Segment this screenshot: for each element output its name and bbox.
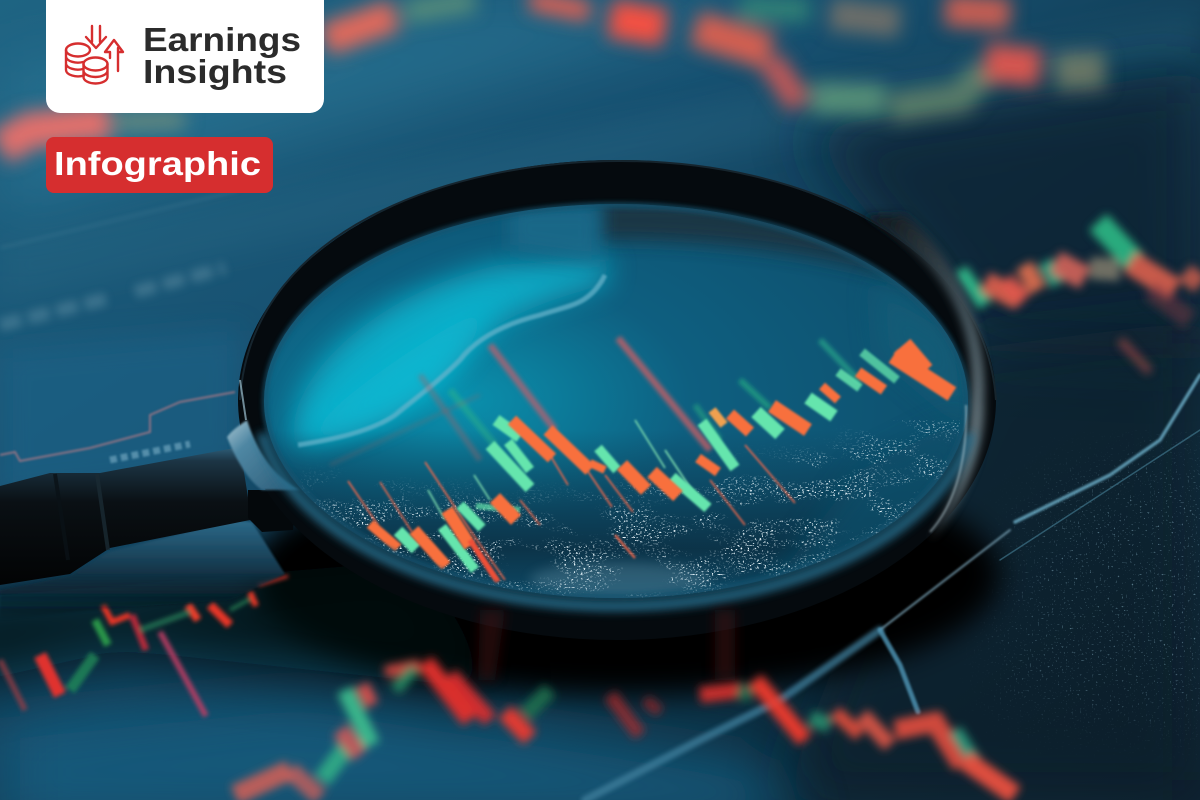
line chart: right side (585, 375, 1200, 800)
badge: Infographic: Infographic (54, 145, 261, 182)
blurred candlesticks: top of the image (0, 0, 1105, 148)
lens wicks (330, 338, 860, 580)
magnifier cast shadow (0, 455, 1000, 695)
rim right highlight (860, 215, 984, 540)
lens lip (262, 433, 970, 606)
blurred candlesticks: bottom of the image (0, 576, 1015, 797)
lens line chart (298, 275, 605, 445)
lens green candles (398, 352, 897, 570)
lower body reflections (478, 610, 735, 680)
lens edge shading (265, 205, 967, 597)
lens speckles (300, 420, 960, 600)
faint chart text and trend line: left side (0, 190, 240, 461)
magnifying glass (0, 160, 996, 680)
logo panel (46, 0, 324, 113)
logo text: Insights (143, 53, 287, 90)
lens orange candles (370, 346, 952, 582)
badge: Infographic (46, 137, 273, 193)
blurred candlesticks: right side (960, 222, 1200, 372)
collar (227, 380, 300, 490)
logo text: Earnings (143, 21, 301, 58)
logo text (143, 21, 301, 90)
icon: coins with arrows (66, 26, 123, 84)
handle reflection on surface (0, 520, 285, 620)
magnifier rim (238, 160, 996, 640)
lens glass (260, 200, 980, 600)
magnifier handle (0, 447, 296, 620)
